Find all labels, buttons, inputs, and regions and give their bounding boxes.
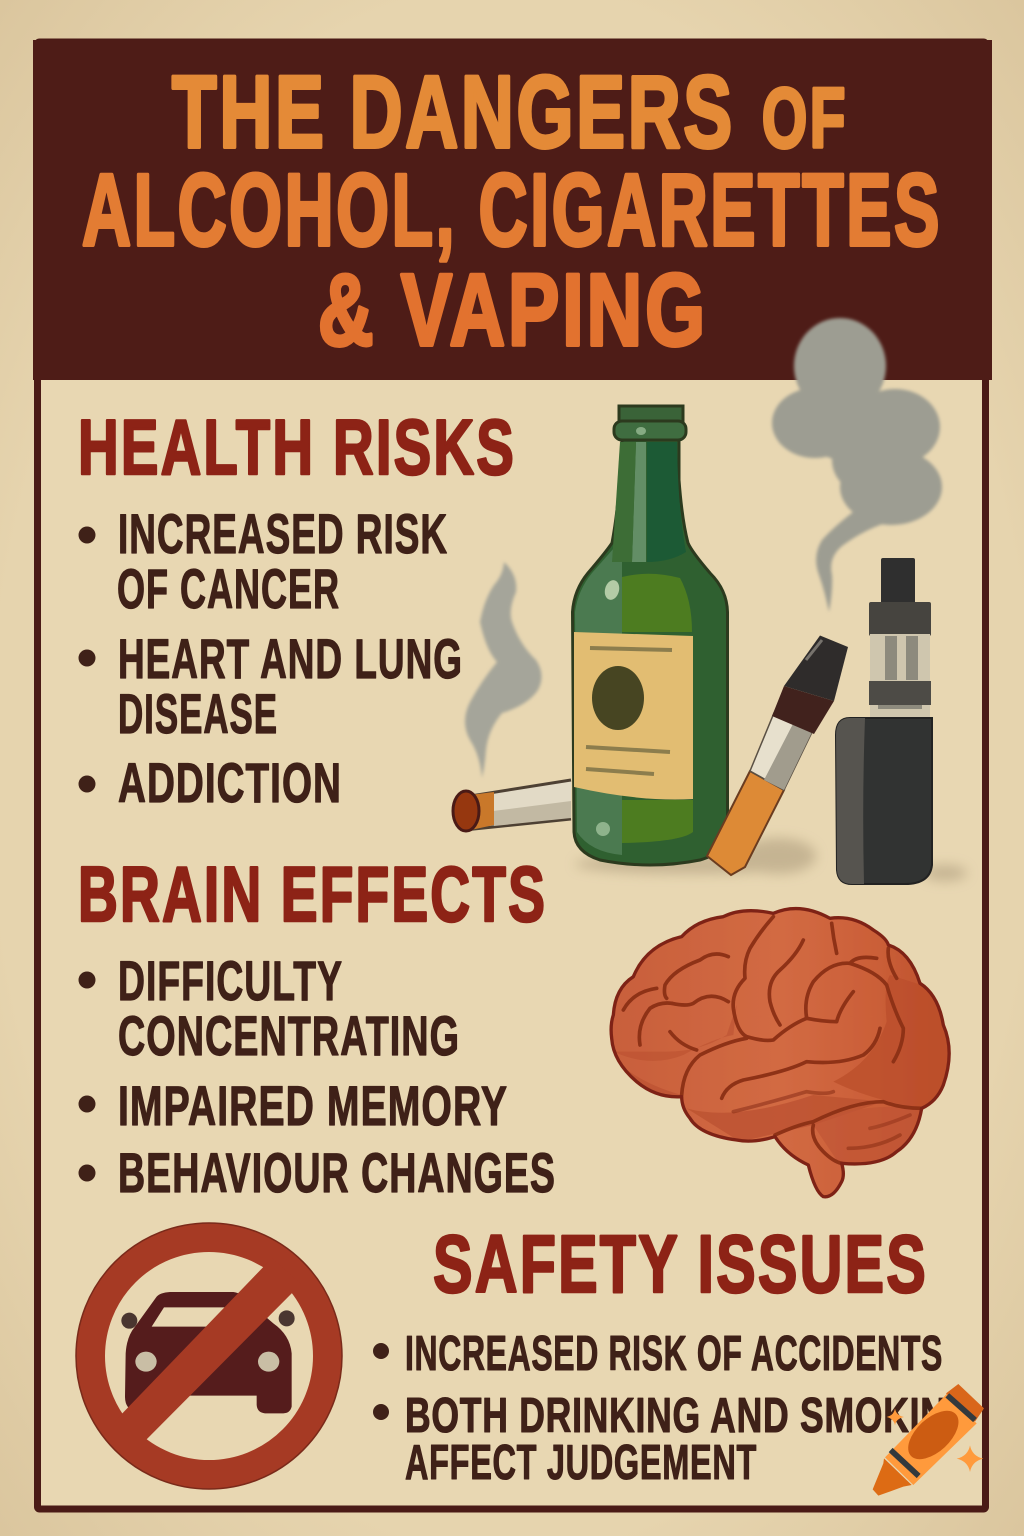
header band	[33, 40, 992, 380]
list: health risks: OF CANCER	[117, 557, 340, 620]
bottle label	[574, 632, 693, 800]
list: health risks: DISEASE	[118, 682, 278, 745]
list: health risks: HEART AND LUNG	[118, 627, 463, 690]
icon: box vape mod	[836, 558, 932, 884]
list: brain effects: CONCENTRATING	[118, 1004, 460, 1067]
list: brain effects: BEHAVIOUR CHANGES	[118, 1141, 556, 1204]
icon: brain	[607, 909, 953, 1197]
list: health risks	[78, 502, 463, 814]
list: safety issues	[373, 1327, 975, 1490]
list: brain effects	[78, 949, 556, 1204]
ground shadows	[575, 838, 967, 881]
title: OF	[762, 71, 848, 165]
list: safety issues: AFFECT JUDGEMENT	[405, 1436, 757, 1490]
icon: no driving sign	[76, 1223, 342, 1489]
cigarette smoke	[465, 562, 542, 778]
icon: green bottle	[572, 406, 728, 865]
icon: crayon logo	[873, 1384, 984, 1496]
icon: cigarette	[453, 562, 571, 831]
title	[82, 55, 942, 367]
icon: large smoke cloud	[772, 318, 942, 612]
title: THE DANGERS	[172, 55, 735, 169]
list: brain effects: DIFFICULTY	[118, 949, 343, 1012]
list: health risks: ADDICTION	[118, 751, 342, 814]
icon: vape pen	[707, 636, 848, 875]
car	[121, 1292, 295, 1413]
title: & VAPING	[318, 253, 708, 367]
heading: health risks: HEALTH RISKS	[78, 403, 516, 491]
list: health risks: INCREASED RISK	[118, 502, 448, 565]
heading: brain effects: BRAIN EFFECTS	[78, 850, 547, 938]
list: brain effects: IMPAIRED MEMORY	[118, 1074, 508, 1137]
